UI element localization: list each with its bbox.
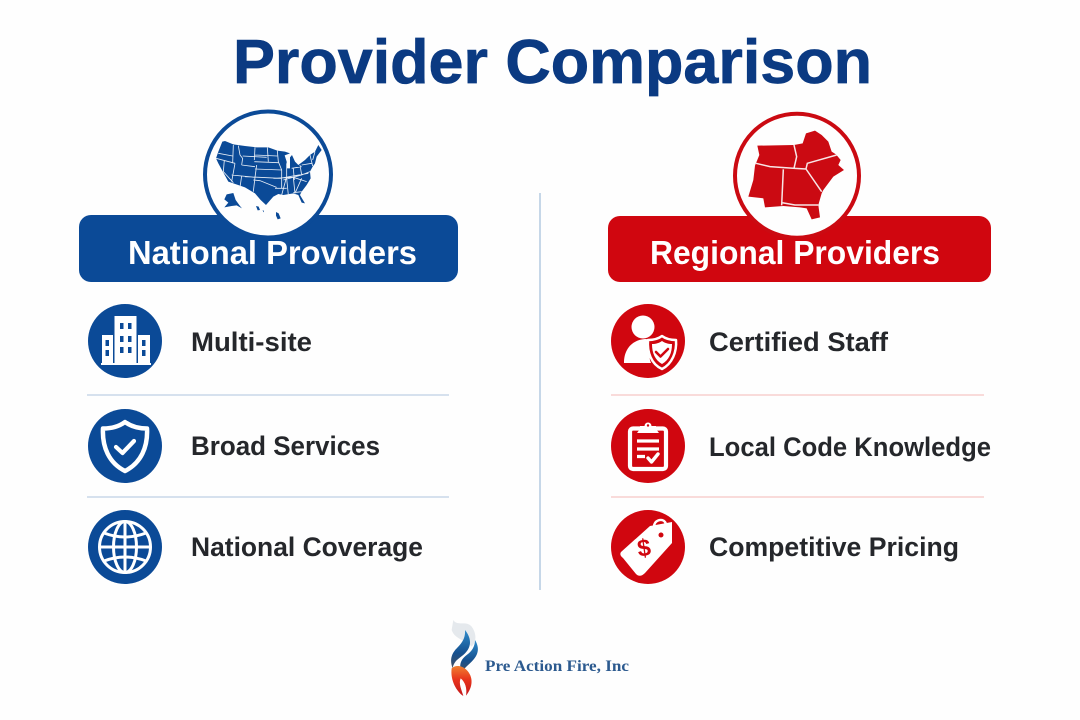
- item: multi-site: [88, 304, 312, 378]
- logo text: Pre Action Fire, Inc: [485, 658, 629, 675]
- icon: price tag: [611, 510, 685, 584]
- banner: national providers: [79, 215, 458, 282]
- center divider: [539, 193, 541, 590]
- panel: regional providers: [608, 114, 991, 584]
- logo: Pre Action Fire: [451, 620, 629, 696]
- icon: Hawaii: [256, 206, 281, 219]
- label: Broad Services: [191, 431, 380, 461]
- item: competitive pricing: [611, 510, 959, 584]
- item: national coverage: [88, 510, 423, 584]
- icon: person with shield: [611, 304, 685, 378]
- panel: national providers: [79, 112, 458, 584]
- item: certified staff: [611, 304, 889, 378]
- icon: globe: [88, 510, 162, 584]
- icon: southeast map badge: [735, 114, 859, 238]
- label: Local Code Knowledge: [709, 432, 991, 462]
- icon: shield check: [88, 409, 162, 483]
- banner label: National Providers: [128, 234, 417, 271]
- title: Provider Comparison: [233, 28, 872, 97]
- banner label: Regional Providers: [650, 234, 940, 271]
- icon: buildings: [88, 304, 162, 378]
- label: Multi-site: [191, 327, 312, 357]
- icon: flame: [451, 620, 478, 696]
- dollar sign: $: [636, 534, 653, 563]
- label: Competitive Pricing: [709, 532, 959, 562]
- label: Certified Staff: [709, 327, 889, 357]
- banner: regional providers: [608, 216, 991, 282]
- icon: US map badge: [205, 112, 331, 238]
- item: broad services: [88, 409, 380, 483]
- label: National Coverage: [191, 532, 423, 562]
- item: local code knowledge: [611, 409, 991, 483]
- icon: Alaska: [224, 193, 242, 208]
- icon: clipboard: [611, 409, 685, 483]
